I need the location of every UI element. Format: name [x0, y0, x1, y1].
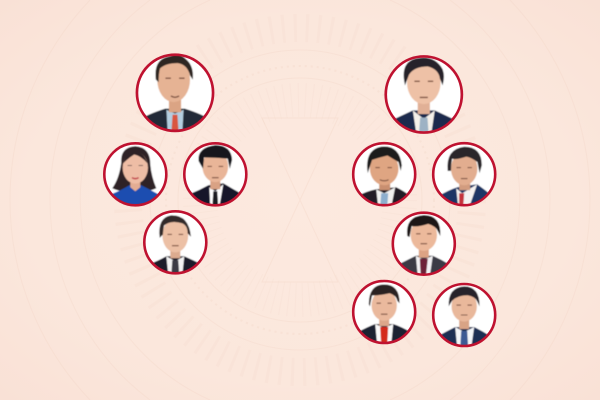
- portrait: right row 4, red tie: [351, 279, 417, 345]
- portrait: right row 2, right man: [431, 141, 497, 207]
- portrait: right top: [384, 54, 464, 135]
- portrait: right row 3: [391, 211, 457, 277]
- portrait: left row 3, striped tie: [142, 209, 208, 275]
- portrait: left row 2, man with dark tie: [182, 141, 248, 207]
- portrait: left top: [135, 53, 215, 133]
- portrait: right row 4, striped blue tie: [431, 282, 497, 348]
- portrait: left row 2, woman in blue: [102, 141, 168, 207]
- portrait: right row 2, left man: [351, 141, 417, 207]
